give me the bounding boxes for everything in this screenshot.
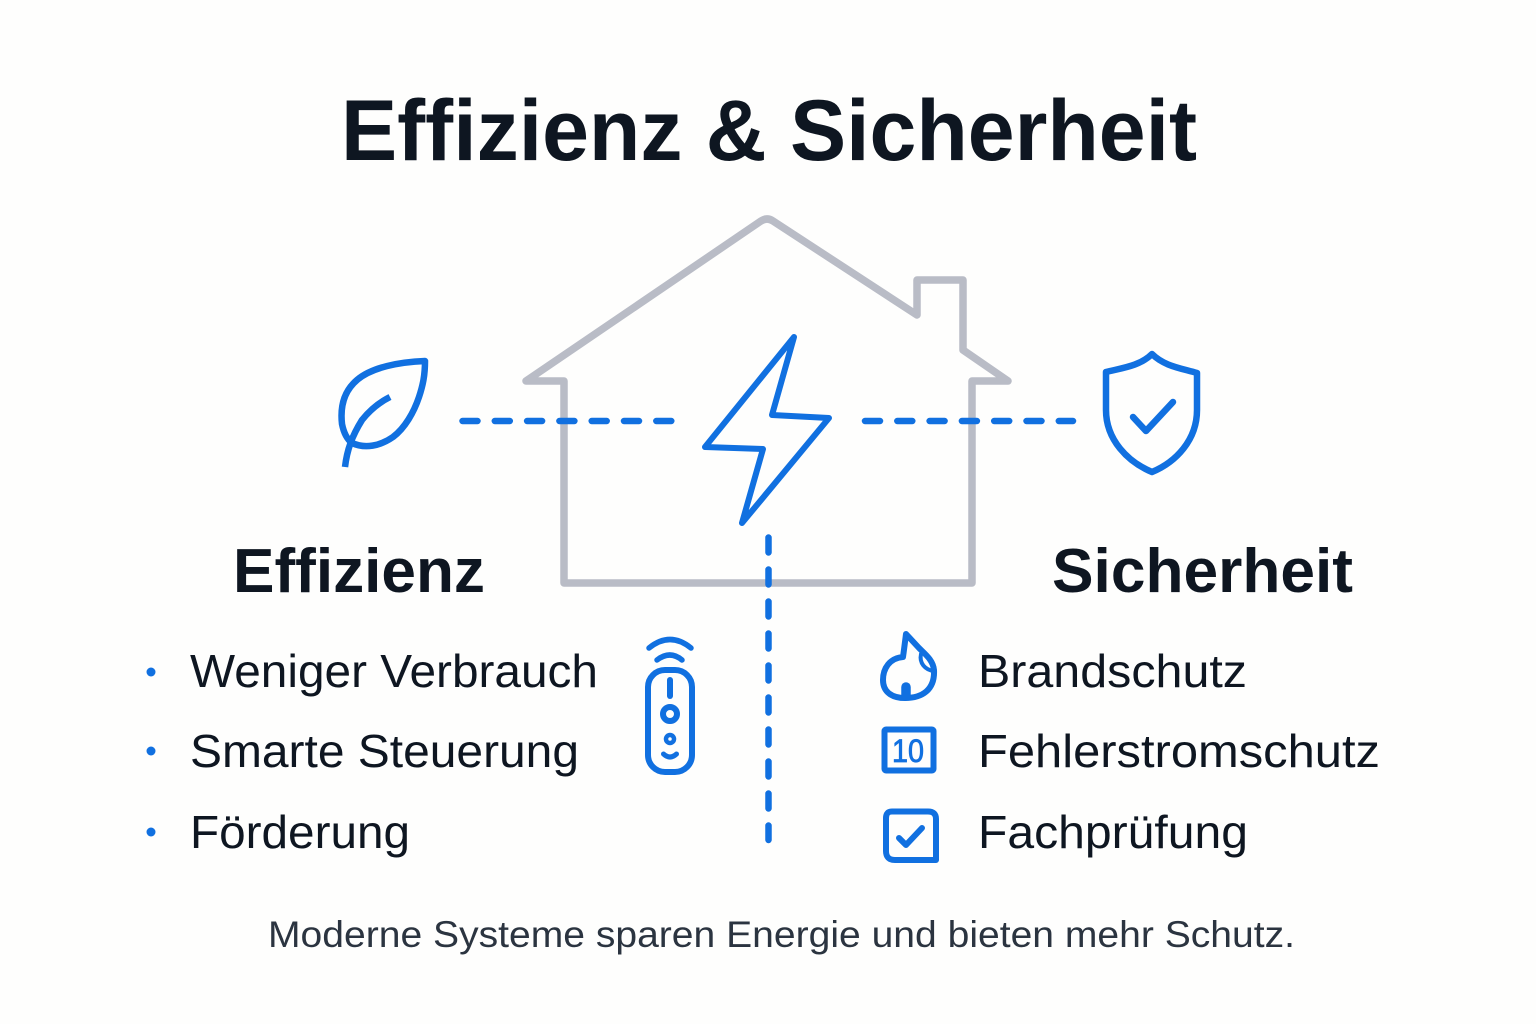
footer caption: Moderne Systeme sparen Energie und bieten mehr Schutz. (268, 914, 1295, 955)
icon: shield with check (1106, 354, 1197, 472)
list: Sicherheit: Brandschutz (978, 645, 1247, 697)
left dashed connector (462, 418, 672, 424)
heading: Effizienz: Effizienz (233, 537, 485, 606)
icon: flame (883, 634, 934, 698)
list: Effizienz: Weniger Verbrauch (190, 645, 598, 697)
icon: lightning bolt (705, 337, 829, 523)
icon: remote control (648, 640, 692, 772)
list: Effizienz: Förderung (190, 806, 410, 858)
list: Sicherheit: Fehlerstromschutz (978, 725, 1380, 777)
list: Effizienz (146, 645, 598, 858)
heading: Sicherheit: Sicherheit (1052, 537, 1353, 606)
icon: 10 ampere fuse: 10 (892, 733, 924, 769)
icon: leaf (342, 361, 425, 467)
list: Sicherheit: Fachprüfung (978, 806, 1248, 858)
list: Sicherheit (978, 645, 1380, 858)
right dashed connector (865, 418, 1073, 424)
icon: 10 ampere fuse (884, 730, 934, 770)
house outline (526, 219, 1008, 583)
icon: checkbox (886, 812, 936, 860)
list: Effizienz: Smarte Steuerung (190, 725, 579, 777)
vertical dashed connector (765, 538, 772, 840)
title: Effizienz & Sicherheit (341, 83, 1197, 179)
